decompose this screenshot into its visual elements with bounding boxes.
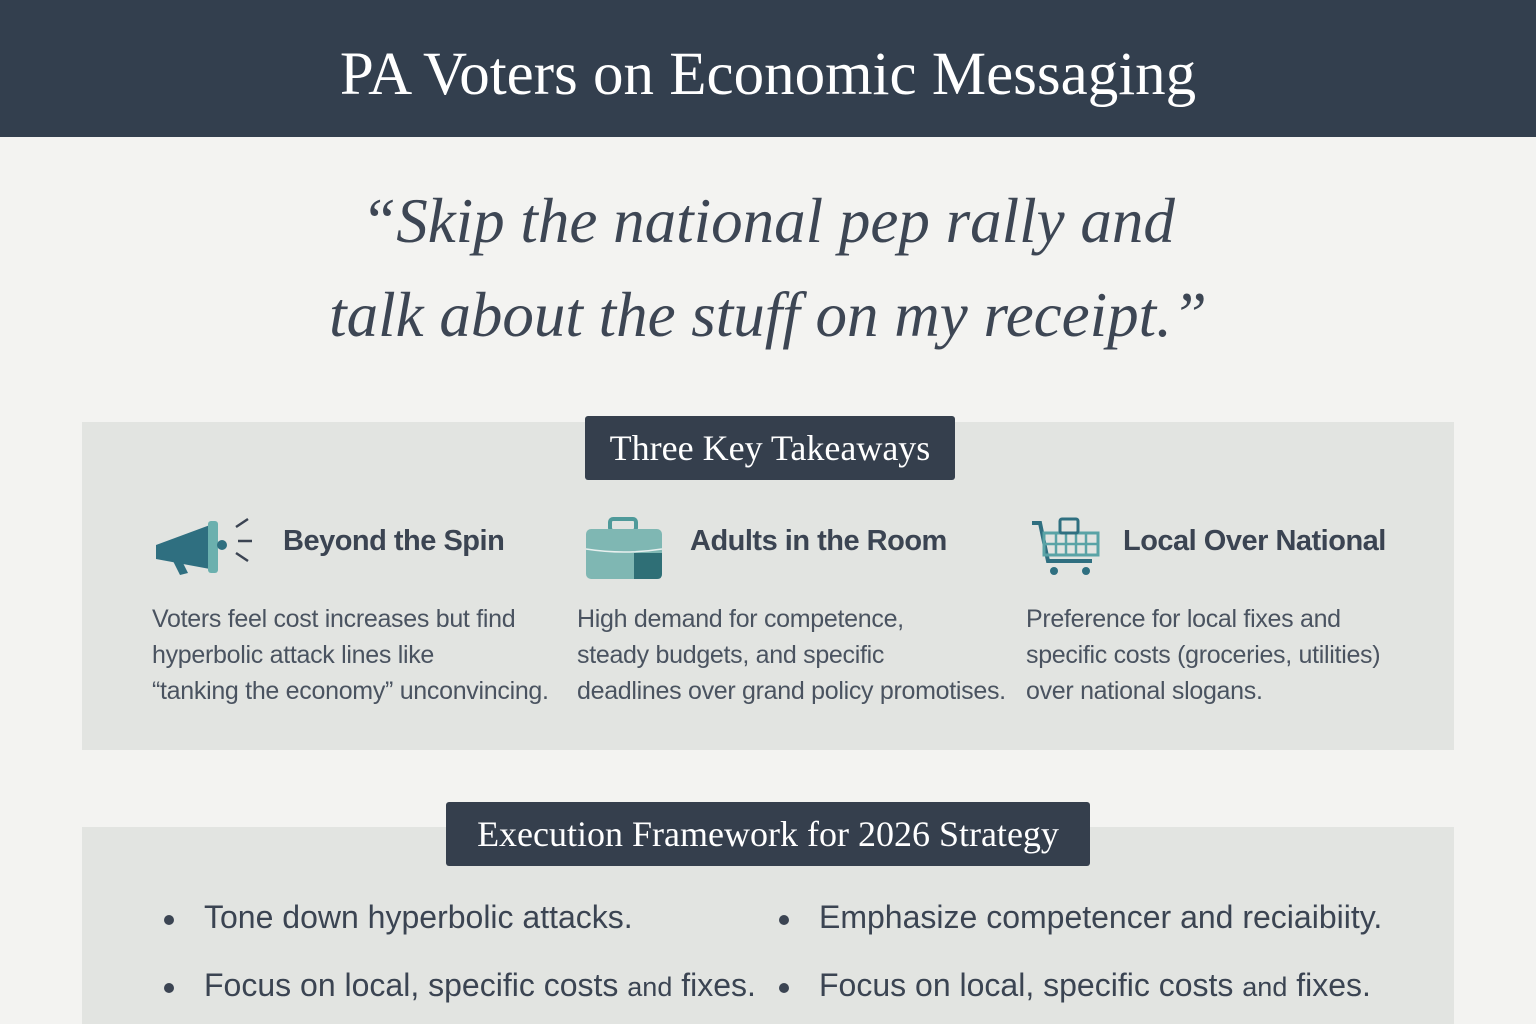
panel: takeaways bbox=[82, 422, 1454, 750]
text: Voters feel cost increases but find bbox=[152, 605, 515, 633]
text: steady budgets, and specific bbox=[577, 641, 884, 669]
text: hyperbolic attack lines like bbox=[152, 641, 434, 669]
text bbox=[577, 605, 1006, 705]
header: PA Voters on Economic Messaging bbox=[340, 41, 1196, 108]
bullet 2: Emphasize competencer and reciaibiity. bbox=[819, 899, 1382, 935]
text: over national slogans. bbox=[1026, 677, 1263, 705]
text: Preference for local fixes and bbox=[1026, 605, 1341, 633]
heading: Beyond the Spin bbox=[283, 525, 504, 557]
heading: Local Over National bbox=[1123, 525, 1386, 557]
heading: Adults in the Room bbox=[690, 525, 947, 557]
label: execution framework bbox=[446, 802, 1090, 866]
bullet 4: Focus on local, specific costs and fixes. bbox=[819, 967, 1371, 1003]
text bbox=[1026, 605, 1380, 705]
label: execution framework: Execution Framework for 2026 Strategy bbox=[477, 814, 1059, 854]
quote bbox=[329, 186, 1207, 350]
takeaway: local over national bbox=[1026, 518, 1386, 705]
icon: megaphone bbox=[156, 518, 252, 575]
quote: “Skip the national pep rally and bbox=[361, 186, 1175, 256]
panel: execution framework bbox=[82, 827, 1454, 1024]
icon: briefcase bbox=[586, 517, 662, 579]
takeaway: adults in the room bbox=[577, 517, 1006, 705]
bullet 3: Focus on local, specific costs and fixes. bbox=[204, 967, 756, 1003]
text bbox=[152, 605, 549, 705]
text: deadlines over grand policy promotises. bbox=[577, 677, 1006, 705]
takeaway: beyond the spin bbox=[152, 518, 549, 705]
icon: cart bbox=[1032, 518, 1100, 575]
text: High demand for competence, bbox=[577, 605, 904, 633]
label: three key takeaways bbox=[585, 416, 955, 480]
header bbox=[0, 0, 1536, 137]
bullet list bbox=[164, 899, 1382, 1003]
text: “tanking the economy” unconvincing. bbox=[152, 677, 549, 705]
text: specific costs (groceries, utilities) bbox=[1026, 641, 1380, 669]
quote: talk about the stuff on my receipt.” bbox=[329, 280, 1207, 350]
bullet 1: Tone down hyperbolic attacks. bbox=[204, 899, 633, 935]
label: three key takeaways: Three Key Takeaways bbox=[610, 428, 930, 468]
